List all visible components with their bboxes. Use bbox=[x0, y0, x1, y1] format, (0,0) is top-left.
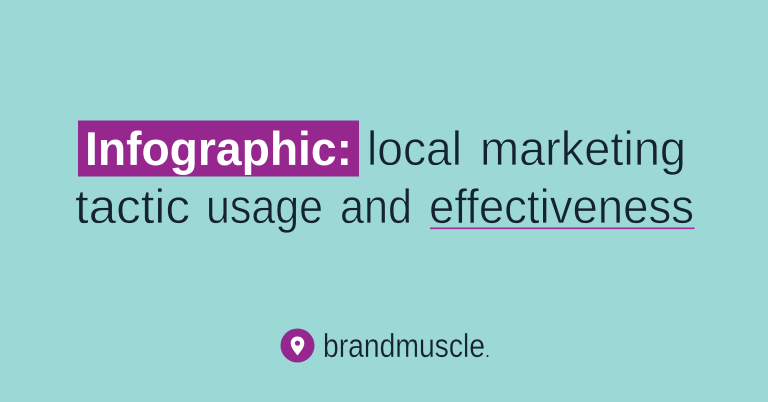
wordmark dot bbox=[486, 355, 488, 357]
title line 1: marketing bbox=[480, 123, 686, 176]
title line 1: local bbox=[367, 123, 462, 176]
title line 2 bbox=[75, 181, 694, 234]
title line 2: usage bbox=[206, 181, 323, 234]
title line 2: tactic bbox=[75, 181, 190, 234]
title line 1 bbox=[367, 123, 686, 176]
underline bbox=[430, 228, 694, 229]
wordmark: brandmuscle bbox=[323, 327, 485, 364]
icon: map pin bbox=[280, 328, 314, 362]
title line 2: effectiveness bbox=[429, 181, 694, 234]
title bbox=[75, 120, 694, 234]
logo bbox=[280, 327, 488, 364]
title line 2: and bbox=[340, 181, 412, 234]
highlight box bbox=[78, 120, 359, 176]
highlighted word: Infographic: bbox=[85, 122, 352, 175]
